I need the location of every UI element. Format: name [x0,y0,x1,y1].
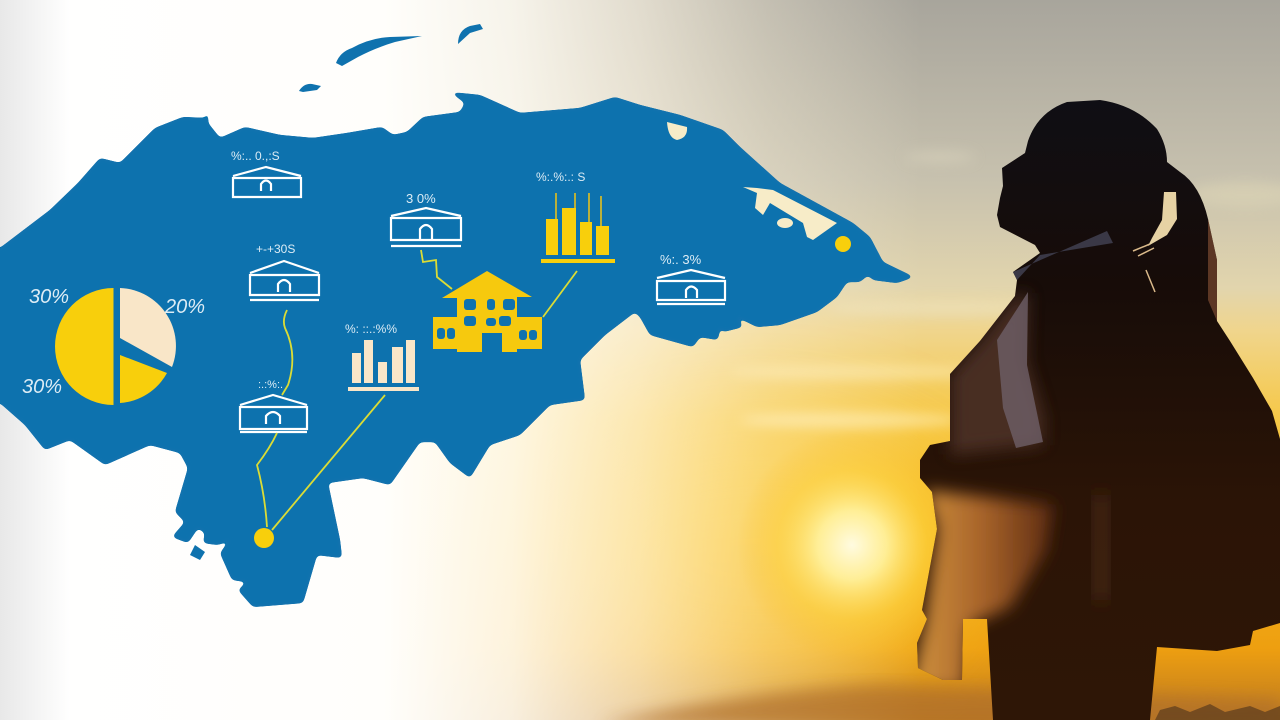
yellow islet [835,236,851,252]
bank icon: right [657,252,725,304]
shirt chest [950,292,1043,455]
bank icon: center left [250,242,319,300]
body silhouette [917,100,1280,720]
collar [1013,231,1113,280]
interior tones [910,292,1107,690]
school building [433,271,542,352]
map landmass [0,92,914,607]
pie labels: 20% [164,296,205,318]
backlit sleeve and hand [910,490,1053,690]
bank icon: lower left: :.:%:. [258,379,283,391]
yellow bar chart: %:.%:.: S [536,170,585,184]
bank icon: lower left [240,379,307,432]
bank icon: top left [231,149,301,197]
lagoon islet [777,218,793,228]
silhouette: student with backpack [910,100,1280,720]
pie labels [22,286,205,398]
bank icon: center left: +-+30S [256,242,295,256]
map of the country [0,24,914,607]
bank icon: top left: %:.. 0.,:S [231,149,280,163]
white bar chart [345,322,419,391]
connector lines [257,250,577,530]
islands [190,24,483,560]
cream lagoon [667,122,837,240]
pie chart [22,286,205,405]
yellow bar chart [536,170,615,263]
bank icon: center [391,191,461,246]
strap glow [1095,495,1107,600]
distant horizon [600,685,1280,720]
ponytail fringe [1208,219,1217,321]
shirt stripe [997,292,1043,448]
bank icon: right: %:. 3% [660,252,702,267]
white bar chart: %: ::.:%% [345,322,397,336]
gap behind ponytail [1148,192,1177,246]
pie labels: 30% [22,376,62,398]
location marker [254,528,274,548]
pie labels: 30% [29,286,69,308]
hair wisps [1133,244,1155,292]
sun glow [737,430,967,660]
bank icon: center: 3 0% [406,191,436,206]
